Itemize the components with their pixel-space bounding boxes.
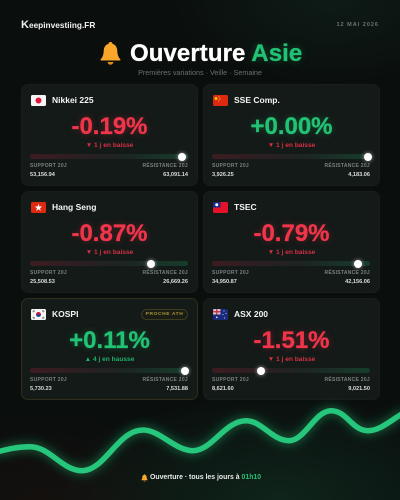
support value: 3,926.25 — [212, 172, 234, 178]
range bar — [212, 368, 370, 373]
range marker — [178, 152, 186, 160]
range bar — [212, 154, 370, 159]
streak: ▼ 1 j en baisse — [86, 249, 133, 256]
support label: SUPPORT 20J — [30, 270, 67, 276]
variation: -0.87% — [71, 220, 148, 247]
flag: China — [213, 95, 228, 106]
icon: small bell — [141, 474, 148, 482]
badge — [141, 309, 188, 320]
resistance label: RÉSISTANCE 20J — [324, 270, 370, 276]
support value: 34,950.87 — [212, 279, 237, 285]
support value: 53,156.94 — [30, 172, 55, 178]
support label: SUPPORT 20J — [212, 163, 249, 169]
index name: ASX 200 — [234, 309, 268, 319]
logo: Keepinvestiing.FR — [21, 19, 95, 31]
streak: ▲ 4 j en hausse — [85, 356, 134, 363]
icon: bell — [100, 42, 120, 65]
resistance label: RÉSISTANCE 20J — [142, 163, 188, 169]
resistance value: 42,156.06 — [345, 279, 370, 285]
range bar — [30, 154, 188, 159]
index name: Nikkei 225 — [52, 95, 94, 105]
resistance value: 26,669.26 — [163, 279, 188, 285]
subtitle: Premières variations · Veille · Semaine — [138, 68, 262, 77]
panel: KOSPI — [21, 298, 198, 400]
resistance label: RÉSISTANCE 20J — [324, 377, 370, 383]
variation: -0.19% — [71, 113, 148, 140]
range bar — [30, 368, 188, 373]
range bar — [212, 261, 370, 266]
variation: +0.00% — [250, 113, 333, 140]
support label: SUPPORT 20J — [30, 377, 67, 383]
variation: +0.11% — [69, 327, 150, 354]
flag: Taiwan — [213, 202, 228, 213]
support label: SUPPORT 20J — [30, 163, 67, 169]
flag: South Korea — [31, 309, 46, 320]
range marker — [181, 366, 189, 374]
panel: Nikkei 225 — [21, 84, 198, 186]
range bar — [30, 261, 188, 266]
streak: ▼ 1 j en baisse — [268, 356, 315, 363]
resistance label: RÉSISTANCE 20J — [142, 270, 188, 276]
range marker — [354, 260, 362, 268]
index name: Hang Seng — [52, 202, 96, 212]
panel: TSEC — [203, 191, 380, 293]
variation: -0.79% — [253, 220, 330, 247]
support label: SUPPORT 20J — [212, 270, 249, 276]
index name: SSE Comp. — [234, 95, 280, 105]
resistance value: 4,183.06 — [348, 172, 370, 178]
panel: SSE Comp. — [203, 84, 380, 186]
flag: Japan — [31, 95, 46, 106]
flag: Hong Kong — [31, 202, 46, 213]
support label: SUPPORT 20J — [212, 377, 249, 383]
wave line — [0, 402, 400, 480]
resistance label: RÉSISTANCE 20J — [324, 163, 370, 169]
resistance label: RÉSISTANCE 20J — [142, 377, 188, 383]
range marker — [257, 366, 265, 374]
variation: -1.51% — [253, 327, 330, 354]
flag: Australia — [213, 309, 228, 320]
range marker — [147, 260, 155, 268]
footer: Ouverture · tous les jours à 01h10 — [150, 474, 261, 481]
streak: ▼ 1 j en baisse — [268, 142, 315, 149]
support value: 8,621.60 — [212, 386, 234, 392]
index name: KOSPI — [52, 309, 78, 319]
support value: 5,730.23 — [30, 386, 52, 392]
badge: PROCHE ATH — [146, 312, 183, 317]
resistance value: 9,021.50 — [348, 386, 370, 392]
index name: TSEC — [234, 202, 257, 212]
resistance value: 63,091.14 — [163, 172, 188, 178]
resistance value: 7,531.88 — [166, 386, 188, 392]
streak: ▼ 1 j en baisse — [268, 249, 315, 256]
title: Ouverture Asie — [130, 40, 302, 67]
range marker — [364, 152, 372, 160]
streak: ▼ 1 j en baisse — [86, 142, 133, 149]
date: 12 MAI 2026 — [336, 22, 379, 28]
support value: 25,508.53 — [30, 279, 55, 285]
panel: ASX 200 — [203, 298, 380, 400]
panel: Hang Seng — [21, 191, 198, 293]
